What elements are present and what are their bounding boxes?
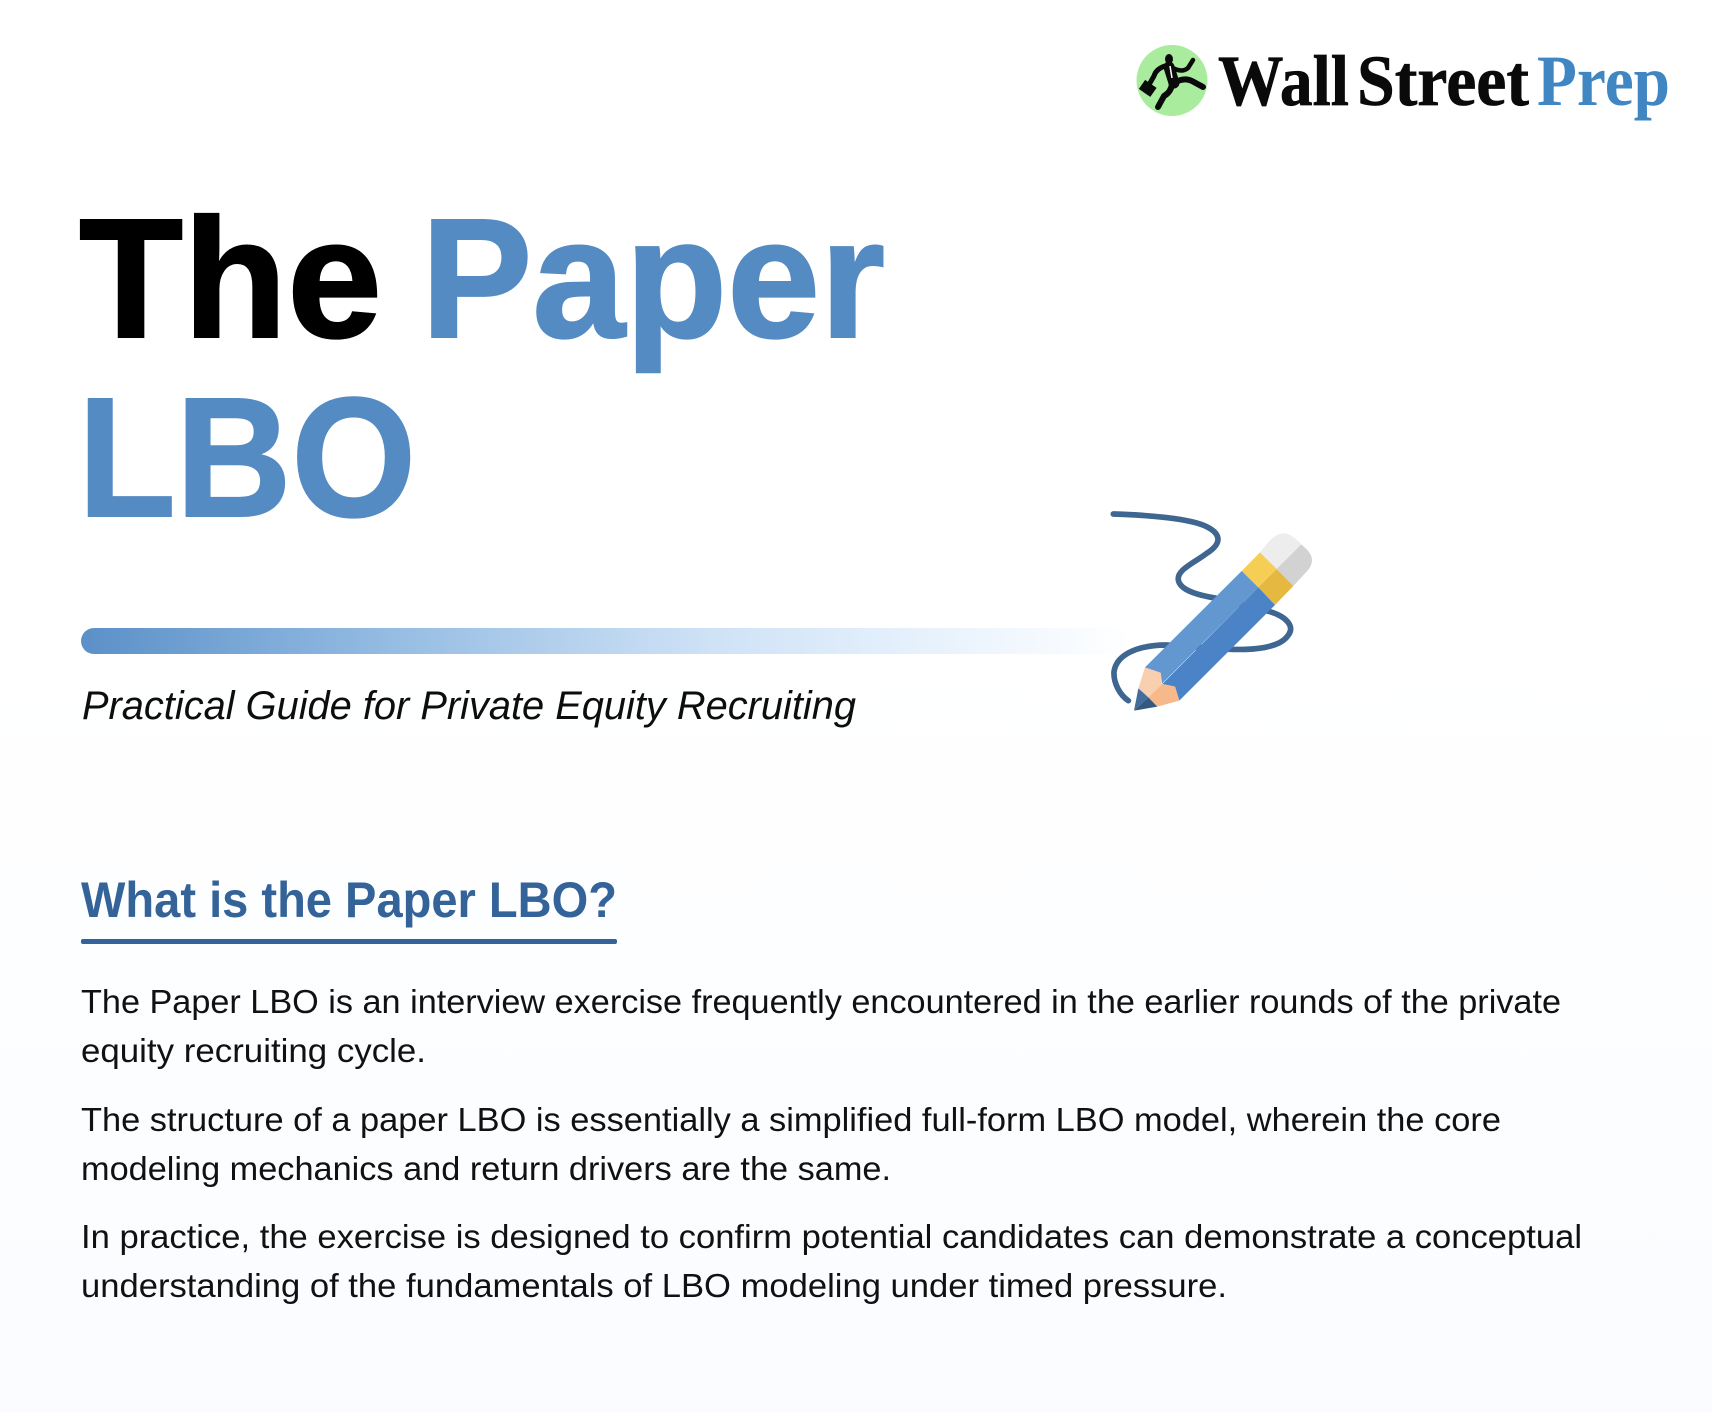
- title: The Paper LBO: LBO: [78, 363, 416, 553]
- title: The Paper LBO: The: [79, 184, 382, 374]
- title: The Paper LBO: Paper: [421, 184, 885, 374]
- paragraph 1: The Paper LBO is an interview exercise frequently encountered in the earlier rounds of the private: [81, 984, 1561, 1021]
- title: The Paper LBO: [78, 184, 885, 553]
- logo wordmark: Street: [1357, 41, 1529, 121]
- paragraph 3: In practice, the exercise is designed to confirm potential candidates can demonstrate a conceptual: [81, 1219, 1582, 1256]
- logo wordmark: Wall: [1218, 41, 1349, 121]
- paragraph 3: understanding of the fundamentals of LBO modeling under timed pressure.: [81, 1268, 1227, 1305]
- icon: pencil with squiggle: [1110, 511, 1312, 711]
- subtitle: Practical Guide for Private Equity Recruiting: [82, 684, 856, 728]
- icon: green circle with running businessman: [1136, 45, 1208, 116]
- gradient bar: [81, 628, 1131, 654]
- paragraph 2: The structure of a paper LBO is essentially a simplified full-form LBO model, wherein the core: [81, 1102, 1501, 1139]
- logo: Wall Street Prep: [1136, 41, 1670, 121]
- heading: What is the Paper LBO?: What is the Paper LBO?: [81, 872, 617, 928]
- paragraph 1: [81, 984, 1561, 1070]
- paragraph 1: equity recruiting cycle.: [81, 1033, 426, 1070]
- body text: [81, 984, 1582, 1305]
- paragraph 3: [81, 1219, 1582, 1305]
- paragraph 2: [81, 1102, 1501, 1188]
- logo wordmark: Prep: [1537, 41, 1670, 121]
- paragraph 2: modeling mechanics and return drivers are the same.: [81, 1151, 891, 1188]
